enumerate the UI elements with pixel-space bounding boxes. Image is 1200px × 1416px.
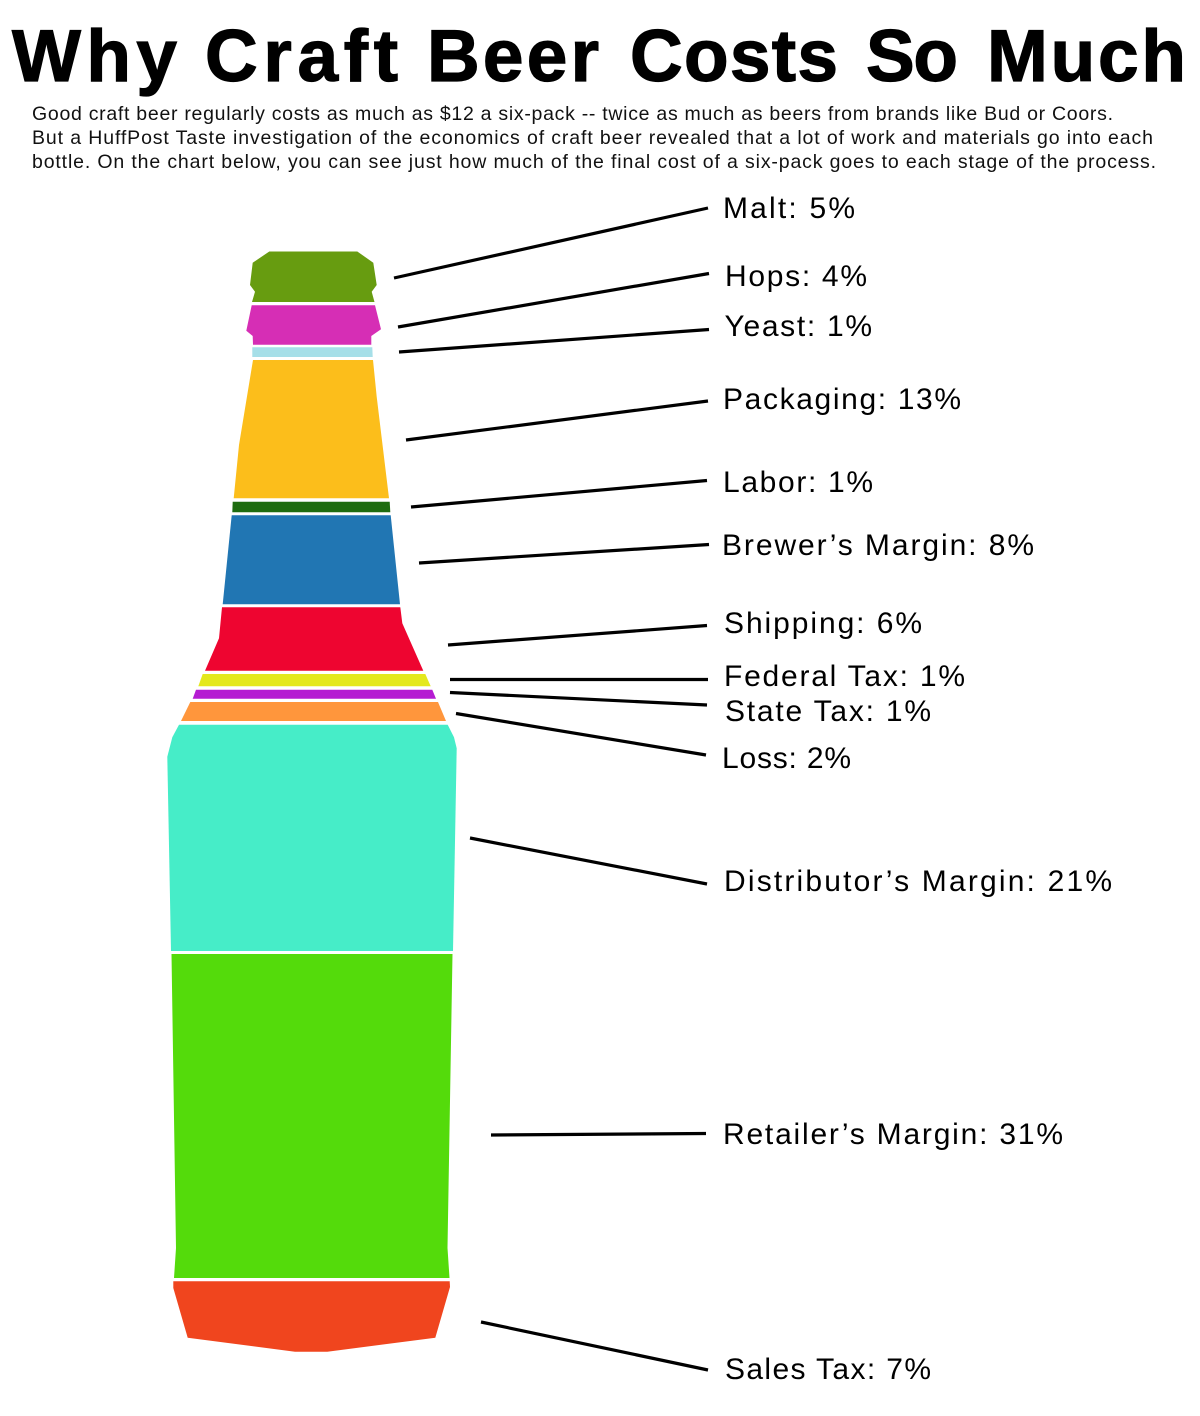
label: distributor's margin: Distributor’s Margin: 21% — [724, 865, 1112, 898]
title — [12, 16, 1186, 97]
segment: sales tax — [173, 1281, 450, 1352]
label: shipping: Shipping: 6% — [724, 607, 922, 640]
title: Craft — [205, 16, 398, 97]
title: So — [866, 16, 958, 97]
bottle chart — [167, 252, 457, 1352]
segment: labor — [232, 502, 390, 512]
label: loss: Loss: 2% — [722, 742, 851, 775]
label: labor: Labor: 1% — [723, 466, 873, 499]
label: yeast: Yeast: 1% — [724, 310, 872, 343]
title: Much — [987, 16, 1186, 97]
segment: shipping — [205, 607, 423, 671]
title: Beer — [427, 16, 599, 97]
label: state tax: State Tax: 1% — [725, 695, 931, 728]
title: Why — [12, 16, 177, 97]
intro text block — [32, 103, 1156, 173]
intro text block: bottle. On the chart below, you can see just how much of the final cost of a six-pack goes to each stage of the process. — [32, 151, 1156, 173]
segment: distributor's margin — [167, 725, 457, 951]
label: hops: Hops: 4% — [725, 260, 867, 293]
label: sales tax: Sales Tax: 7% — [725, 1353, 931, 1386]
segment: malt — [250, 252, 377, 302]
label: malt: Malt: 5% — [723, 192, 855, 225]
label: brewer's margin: Brewer’s Margin: 8% — [722, 529, 1034, 562]
segment: retailer's margin — [172, 954, 452, 1278]
label: packaging: Packaging: 13% — [723, 383, 961, 416]
segment: brewer's margin — [223, 515, 400, 604]
leader lines — [394, 208, 709, 1370]
segment: loss — [181, 702, 446, 721]
intro text block: But a HuffPost Taste investigation of the economics of craft beer revealed that a lot of work and materials go into each — [32, 127, 1153, 149]
segment: hops — [246, 305, 381, 345]
title: Costs — [630, 16, 838, 97]
segment: packaging — [234, 360, 389, 498]
segment: federal tax — [198, 674, 431, 686]
segment: yeast — [252, 347, 373, 357]
segment: state tax — [193, 690, 436, 699]
label: retailer's margin: Retailer’s Margin: 31% — [723, 1118, 1063, 1151]
label: federal tax: Federal Tax: 1% — [724, 660, 965, 693]
labels — [722, 192, 1112, 1386]
intro text block: Good craft beer regularly costs as much as $12 a six-pack -- twice as much as beers from brands like Bud or Coors. — [32, 103, 1113, 125]
